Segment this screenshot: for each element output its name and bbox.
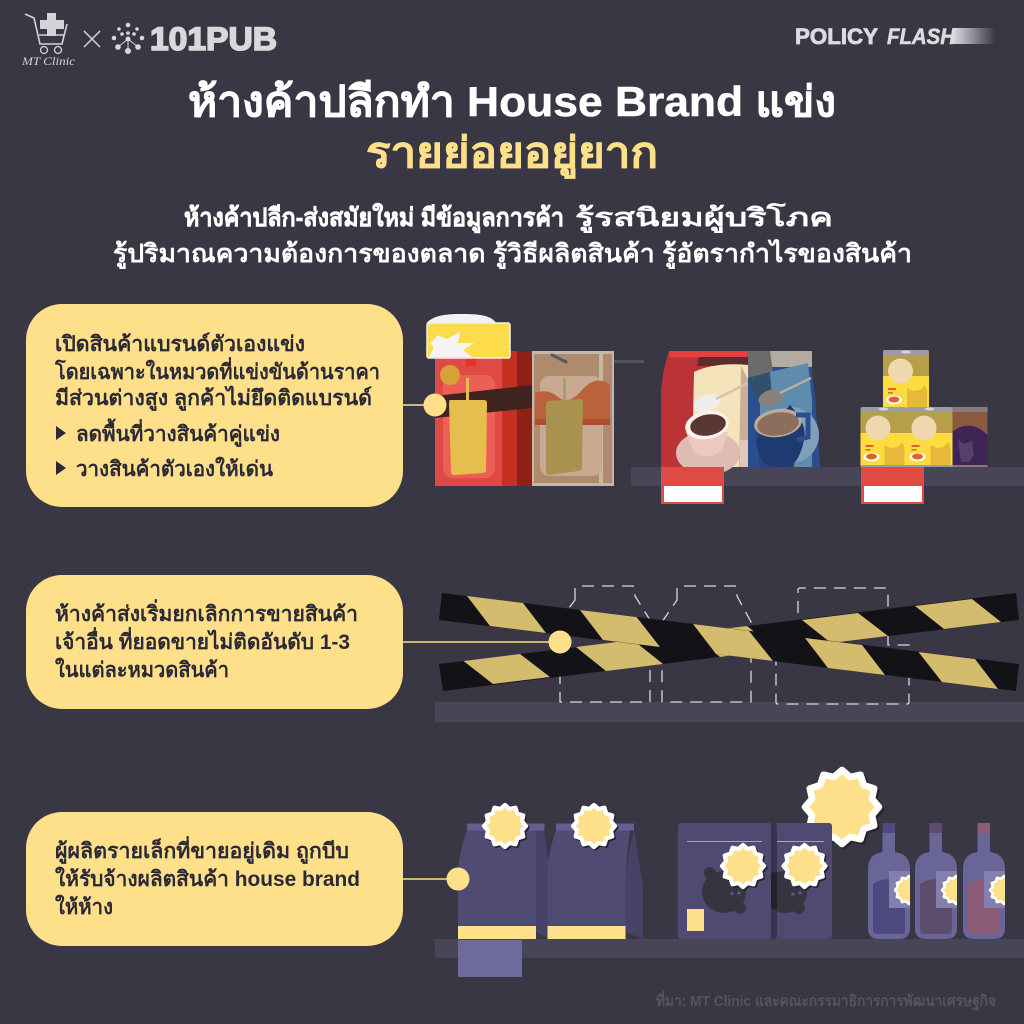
title: รายย่อยอยู่ยาก [366,129,658,179]
callout connector 2 [403,630,572,654]
badge: bag 1 [484,805,528,848]
callout 2: delisting [26,575,403,709]
callout 1: own-brand competition [26,304,403,507]
callout 3: small producers: ให้ห้าง [55,894,113,919]
house brand bag 2 [548,824,643,939]
coffee bag: red [661,351,756,475]
shelf 1 [631,467,1024,486]
house brand bag 1 [458,824,550,977]
shelf 2 [435,702,1024,722]
callout connector 3 [403,868,470,890]
callout 1: own-brand competition: วางสินค้าตัวเองให้เด่น [76,456,274,481]
price tag 1 [661,467,724,504]
house brand box pair [678,823,832,939]
shelf 3 [435,939,1024,958]
subtitle: รู้ปริมาณความต้องการของตลาด รู้วิธีผลิตสินค้า รู้อัตรากำไรของสินค้า [113,238,912,270]
subtitle: ห้างค้าปลีก-ส่งสมัยใหม่ มีข้อมูลการค้า [184,202,564,234]
callout 2: delisting: ในแต่ละหมวดสินค้า [55,657,229,682]
red product pack with promo sticker [426,314,532,486]
callout 1: own-brand competition: มีส่วนต่างสูง ลูกค้าไม่ยึดติดแบรนด์ [55,385,372,412]
logo: Policy Flash [795,24,995,49]
stacked cat-food cans [860,350,988,467]
callout 1: own-brand competition: ลดพื้นที่วางสินค้าคู่แข่ง [76,418,280,448]
badge: bag 2 [573,805,616,848]
logo: MT Clinic: MT Clinic [21,56,75,68]
callout 2: delisting: เจ้าอื่น ที่ยอดขายไม่ติดอันดับ 1-3 [55,626,350,654]
logo: 101PUB: 101PUB [150,21,277,57]
callout connector 1 [403,394,446,416]
coffee bag: blue [748,351,820,467]
callout 1: own-brand competition: โดยเฉพาะในหมวดที่แข่งขันด้านราคา [54,356,380,384]
subtitle: รู้รสนิยมผู้บริโภค [575,202,833,234]
barrier tape [439,593,1019,691]
multiply sign [84,31,100,47]
title: ห้างค้าปลีกทำ House Brand แข่ง [188,78,836,125]
subtitle [113,202,912,270]
callout 2: delisting: ห้างค้าส่งเริ่มยกเลิกการขายสินค้า [55,598,358,626]
logo: MT Clinic [21,13,75,68]
logo: Policy Flash: POLICY [795,24,878,49]
bottle 3 [963,823,1018,939]
callout 1: own-brand competition: เปิดสินค้าแบรนด์ตัวเองแข่ง [55,332,305,356]
title [188,78,836,179]
callout 3: small producers: ให้รับจ้างผลิตสินค้า house brand [55,866,360,891]
bottle 2 [915,823,970,939]
big badge [805,770,881,846]
logo: Policy Flash: FLASH [887,24,956,49]
bottle 1 [868,823,923,939]
callout 3: small producers: ผู้ผลิตรายเล็กที่ขายอยู่เดิม ถูกบีบ [55,835,349,865]
badge: box 2 [784,845,827,888]
dashed outlines of removed products [560,586,909,704]
callout 3: small producers [26,812,403,946]
badge: box 1 [722,845,766,888]
source note: ที่มา: MT Clinic และคณะกรรมาธิการการพัฒนาเศรษฐกิจ [656,990,996,1011]
price tag 2 [861,467,924,504]
transparent product pack [532,351,644,486]
